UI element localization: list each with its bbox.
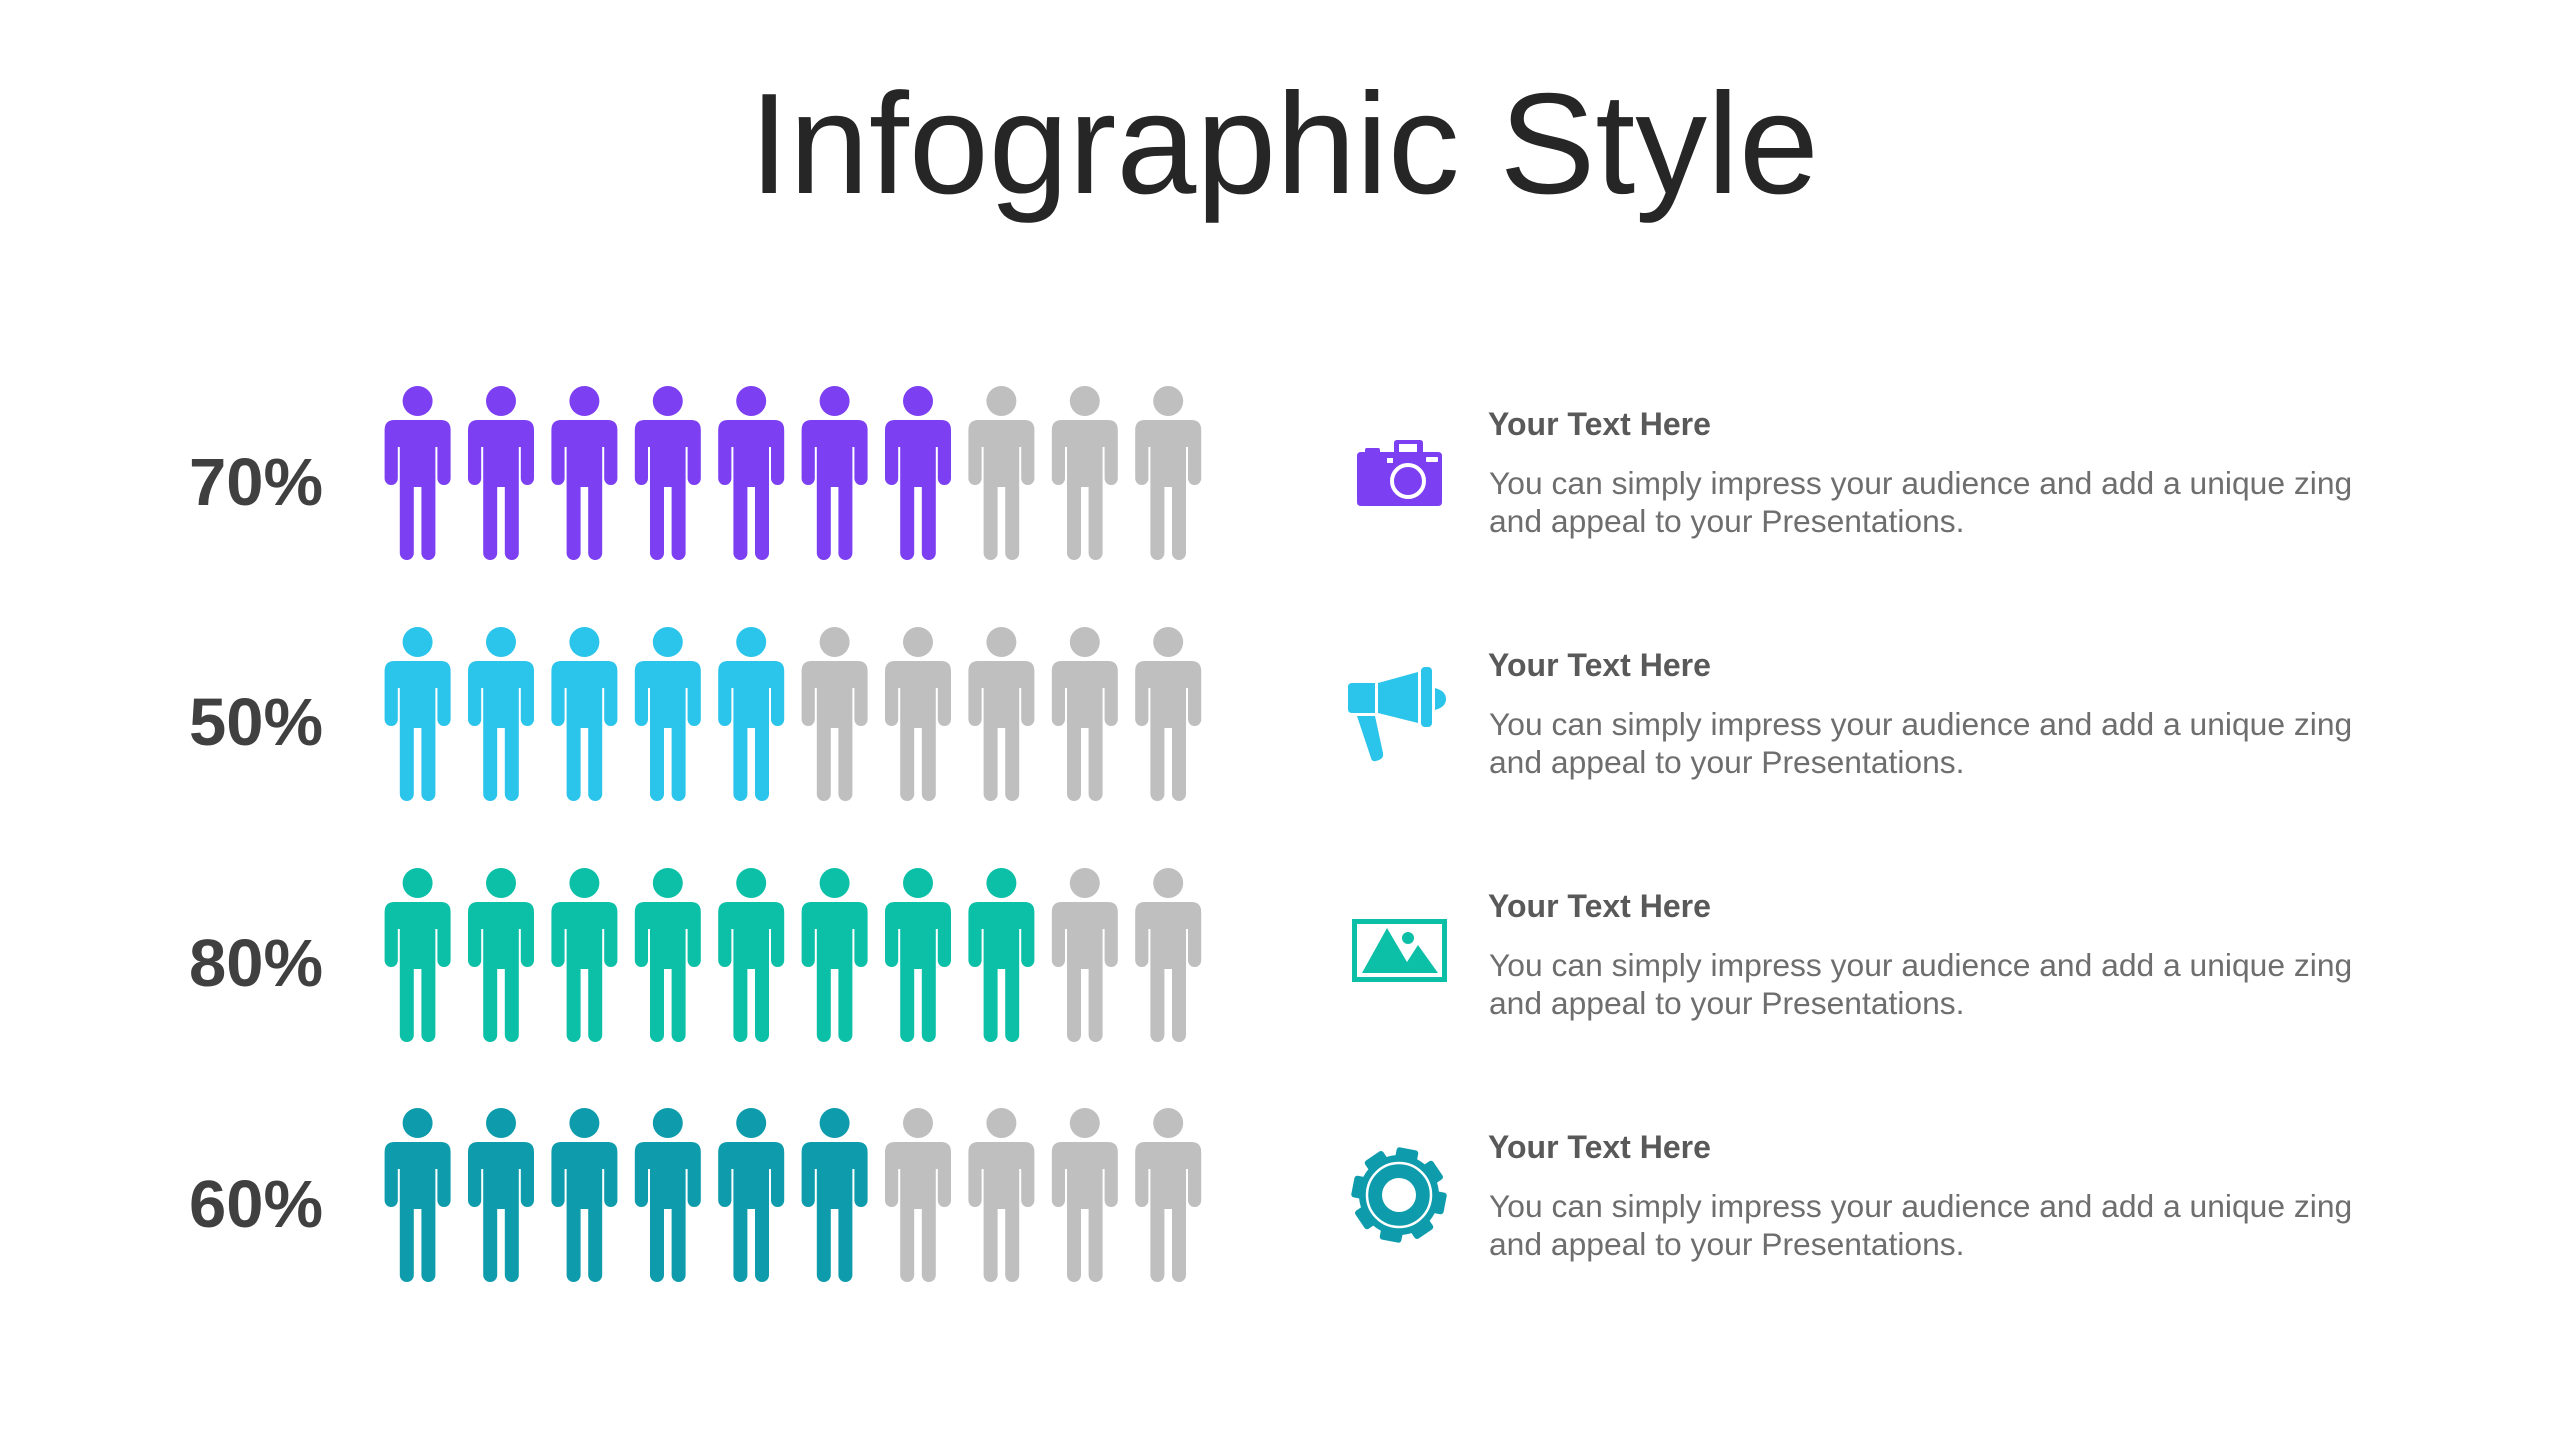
text block: item 2: Your Text Here	[1488, 647, 1711, 683]
text block: item 2: and appeal to your Presentations.	[1489, 744, 1965, 780]
icon: camera	[1357, 440, 1442, 506]
row: 70% label: 70%	[189, 445, 323, 520]
text block: item 4: and appeal to your Presentations.	[1489, 1226, 1965, 1262]
row: 60% label: 60%	[189, 1167, 323, 1242]
text block: item 1: Your Text Here	[1488, 406, 1711, 442]
text block: item 2	[1488, 647, 2352, 780]
row: 50% people chart	[385, 627, 1201, 801]
text block: item 3	[1488, 888, 2352, 1021]
text block: item 3: You can simply impress your audience and add a unique zing	[1489, 947, 2352, 983]
row: 80% people chart	[385, 868, 1201, 1042]
row: 60% people chart	[385, 1108, 1201, 1282]
text block: item 4	[1488, 1129, 2352, 1262]
text block: item 4: Your Text Here	[1488, 1129, 1711, 1165]
text block: item 3: Your Text Here	[1488, 888, 1711, 924]
icon: gear	[1351, 1147, 1447, 1243]
text block: item 2: You can simply impress your audience and add a unique zing	[1489, 706, 2352, 742]
row: 50% label: 50%	[189, 685, 323, 760]
text block: item 4: You can simply impress your audience and add a unique zing	[1489, 1188, 2352, 1224]
row: 70% people chart	[385, 386, 1201, 560]
text block: item 1: and appeal to your Presentations.	[1489, 503, 1965, 539]
title: Infographic Style	[749, 64, 1819, 224]
icon: megaphone	[1348, 667, 1446, 761]
text block: item 3: and appeal to your Presentations.	[1489, 985, 1965, 1021]
text block: item 1: You can simply impress your audience and add a unique zing	[1489, 465, 2352, 501]
text block: item 1	[1488, 406, 2352, 539]
icon: picture	[1354, 922, 1444, 980]
row: 80% label: 80%	[189, 926, 323, 1001]
